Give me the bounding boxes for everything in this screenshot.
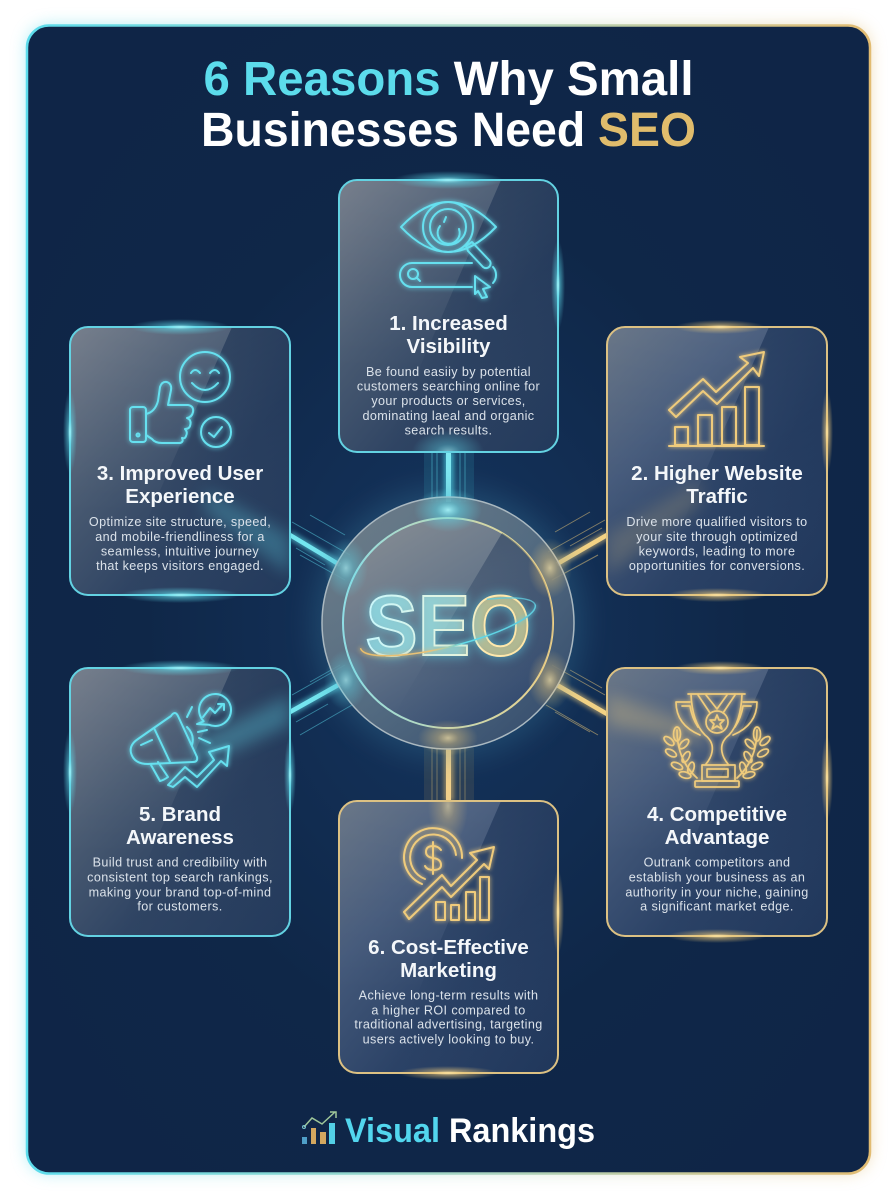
card 4 text: a significant market edge. xyxy=(640,900,794,914)
card glints xyxy=(63,660,296,814)
card glints xyxy=(667,320,833,602)
card 6 heading: 6. Cost-Effective xyxy=(368,936,529,959)
icon: thumbs up and smile xyxy=(130,352,231,447)
card 1 text: search results. xyxy=(405,424,492,438)
card 6 text: Achieve long-term results with xyxy=(359,988,538,1002)
card 6 text: traditional advertising, targeting xyxy=(354,1018,543,1032)
card glints xyxy=(63,319,240,603)
panel: card 1 increased visibility xyxy=(339,171,565,474)
card 6 text: a higher ROI compared to xyxy=(371,1004,526,1018)
SEO hub xyxy=(313,488,583,758)
card 2 heading: 2. Higher Website xyxy=(631,462,803,485)
inner glass disc xyxy=(343,518,553,728)
card 5 heading: Awareness xyxy=(126,826,234,849)
SEO glow: SEO xyxy=(366,579,531,674)
ray: to card 4 xyxy=(546,665,607,735)
card 4 text: Outrank competitors and xyxy=(644,856,790,870)
card 2 text: Drive more qualified visitors to xyxy=(626,515,808,529)
card 4 text: establish your business as an xyxy=(629,870,805,884)
card 4 heading: 4. Competitive xyxy=(647,803,787,826)
connector rays from SEO hub to cards xyxy=(290,452,607,801)
card glints xyxy=(398,870,564,1080)
card 1 text: Be found easiiy by potential xyxy=(366,365,531,379)
ring glints xyxy=(324,488,572,756)
ray: to card 5 xyxy=(290,665,352,735)
panel: card 5 brand awareness xyxy=(63,660,296,936)
icon: megaphone and growth arrow xyxy=(131,694,231,787)
card glints xyxy=(667,661,833,943)
ray: to card 6 xyxy=(424,748,474,801)
icon: dollar coin and growth chart xyxy=(404,828,494,920)
card 2 text: your site through optimized xyxy=(636,530,798,544)
card 3 text: that keeps visitors engaged. xyxy=(96,559,264,573)
SEO lettering: SEO xyxy=(366,579,531,674)
panel: card 2 higher website traffic xyxy=(607,320,833,602)
card 3 text: and mobile-friendliness for a xyxy=(95,530,265,544)
card 6 text: users actively looking to buy. xyxy=(363,1032,534,1046)
outer glass ring xyxy=(322,497,574,749)
orbit ring xyxy=(361,598,535,656)
card 6 heading: Marketing xyxy=(400,959,497,982)
icon: rising chart xyxy=(669,352,764,446)
card 1 heading: 1. Increased xyxy=(389,312,508,335)
card 2 heading: Traffic xyxy=(686,485,748,508)
card 1 text: dominating laeal and organic xyxy=(363,409,534,423)
title line 2: Businesses Need SEO xyxy=(201,104,696,157)
card 5 text: Build trust and credibility with xyxy=(93,856,267,870)
card 4 heading: Advantage xyxy=(665,826,769,849)
card 1 heading: Visibility xyxy=(407,335,491,358)
panel: card 3 improved user experience xyxy=(63,319,290,603)
hub halo xyxy=(313,488,583,758)
ray: to card 2 xyxy=(548,512,607,580)
card glints xyxy=(393,171,565,330)
logo: visual rankings xyxy=(302,1112,595,1150)
title: 6 Reasons Why Small xyxy=(204,53,694,106)
icon: eye and search xyxy=(400,202,496,298)
panel: card 6 cost-effective marketing xyxy=(338,800,564,1080)
card 1 text: customers searching online for xyxy=(357,380,540,394)
card 3 text: Optimize site structure, speed, xyxy=(89,515,271,529)
card 5 text: for customers. xyxy=(137,900,223,914)
card 4 text: authority in your niche, gaining xyxy=(625,886,809,900)
logo wordmark: Visual Rankings xyxy=(345,1112,595,1150)
card 5 text: consistent top search rankings, xyxy=(87,870,273,884)
card 5 heading: 5. Brand xyxy=(139,803,221,826)
logo icon xyxy=(302,1112,336,1144)
card 3 heading: 3. Improved User xyxy=(97,462,263,485)
card 1 text: your products or services, xyxy=(371,394,526,408)
card 3 heading: Experience xyxy=(125,485,235,508)
card 2 text: opportunities for conversions. xyxy=(629,559,805,573)
icon: trophy with laurels xyxy=(662,694,772,787)
panel: card 4 competitive advantage xyxy=(607,661,833,943)
ray: to card 3 xyxy=(290,515,350,580)
card 5 text: making your brand top-of-mind xyxy=(89,886,271,900)
ray: to card 1 xyxy=(424,452,474,502)
card 3 text: seamless, intuitive journey xyxy=(101,544,259,558)
card 2 text: keywords, leading to more xyxy=(639,544,795,558)
hub glass reflection xyxy=(395,533,553,728)
